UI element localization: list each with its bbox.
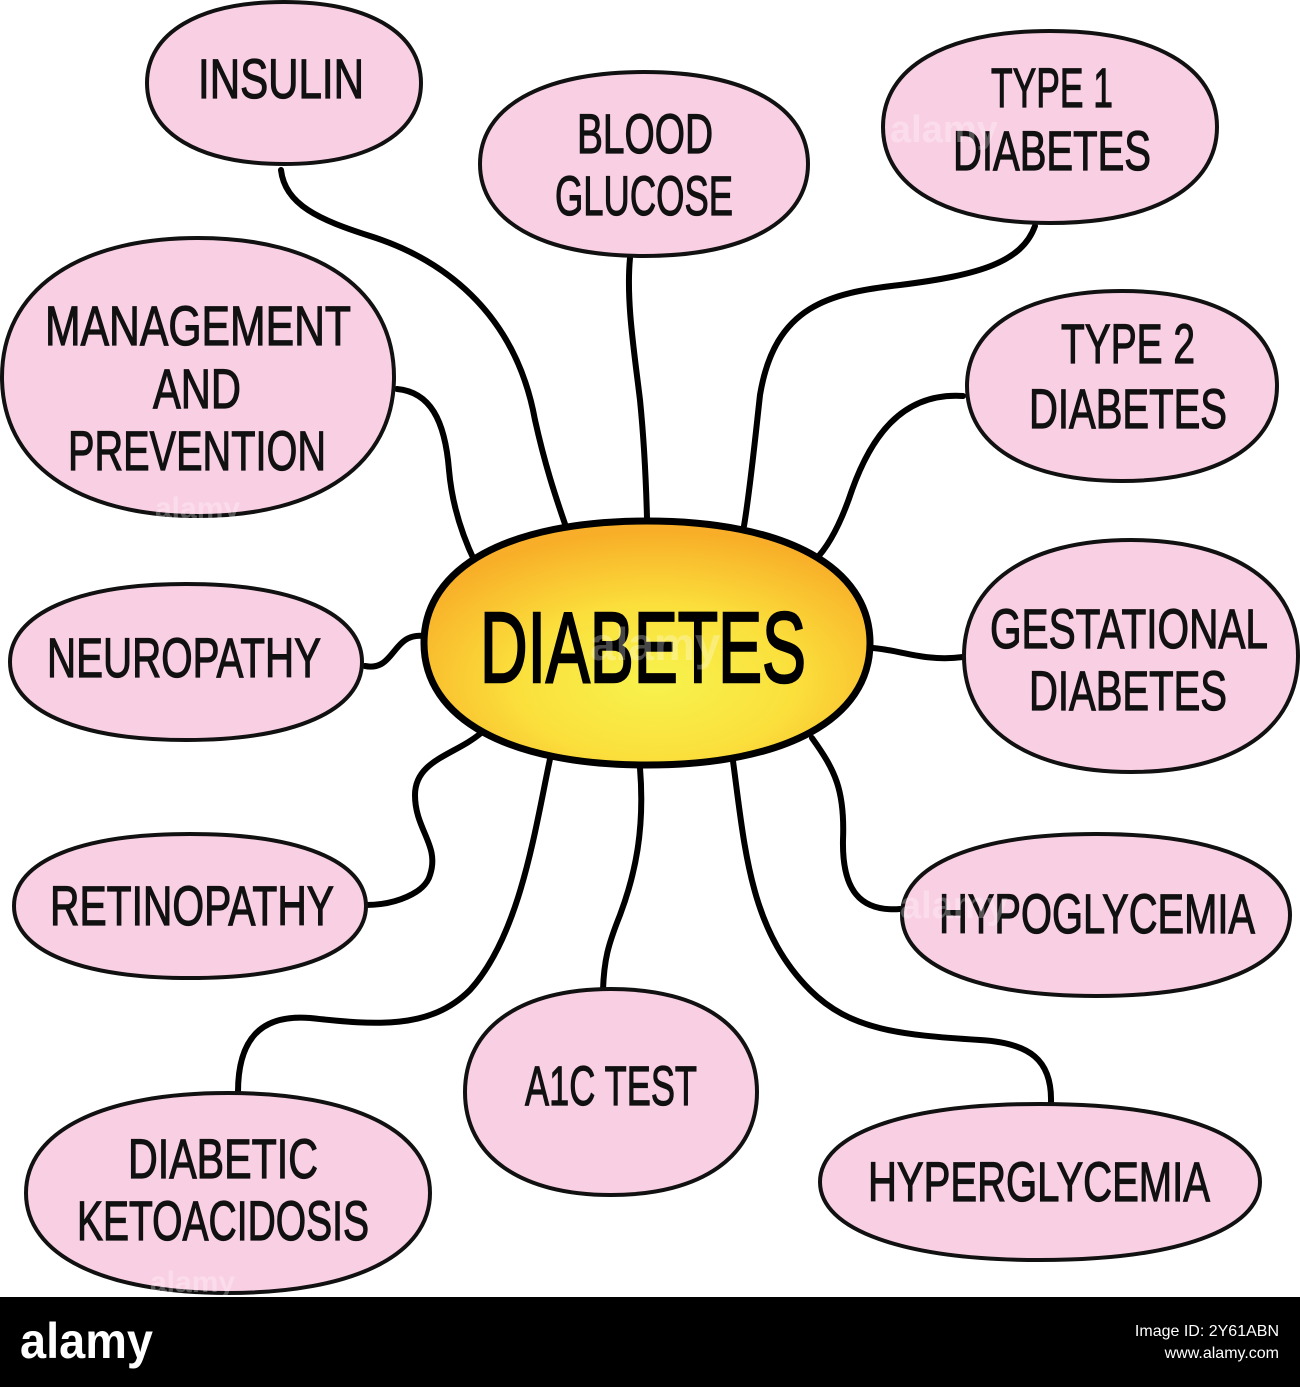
watermarks	[150, 109, 1008, 1299]
watermarks: alamy	[900, 885, 1008, 927]
node: Insulin: INSULIN	[198, 47, 364, 110]
connector lines	[238, 170, 1051, 1102]
website: www.alamy.com	[1164, 1345, 1279, 1362]
node: Type 1 Diabetes	[883, 31, 1217, 223]
central node: Diabetes	[424, 521, 870, 765]
watermarks: alamy	[155, 492, 240, 525]
node: Neuropathy	[10, 584, 362, 740]
node: Neuropathy: NEUROPATHY	[47, 626, 321, 689]
watermarks: alamy	[590, 618, 721, 670]
node: Type 1 Diabetes: DIABETES	[953, 119, 1151, 182]
node: Gestational Diabetes: DIABETES	[1029, 659, 1227, 722]
node: Type 1 Diabetes: TYPE 1	[991, 56, 1113, 119]
node: Diabetic Ketoacidosis: KETOACIDOSIS	[77, 1189, 369, 1252]
node: Management and Prevention	[2, 238, 394, 516]
node: A1C Test	[465, 989, 757, 1195]
node: Diabetic Ketoacidosis: DIABETIC	[128, 1127, 318, 1190]
node: Diabetic Ketoacidosis	[26, 1093, 430, 1293]
node: Management and Prevention: AND	[153, 357, 241, 420]
central node: Diabetes: DIABETES	[480, 592, 806, 704]
image id: Image ID: 2Y61ABN	[1135, 1323, 1279, 1340]
watermarks: alamy	[890, 109, 998, 151]
node: Blood Glucose	[480, 72, 808, 256]
node: Type 2 Diabetes: TYPE 2	[1061, 312, 1195, 375]
node: Blood Glucose: BLOOD	[577, 102, 713, 165]
footer bar	[0, 1297, 1300, 1387]
node: A1C Test: A1C TEST	[525, 1054, 697, 1117]
node: Hyperglycemia	[820, 1104, 1260, 1260]
node: Blood Glucose: GLUCOSE	[555, 164, 733, 227]
footer logo: alamy	[20, 1313, 153, 1369]
watermarks: alamy	[150, 1266, 235, 1299]
node: Retinopathy	[14, 834, 366, 978]
node: Management and Prevention: PREVENTION	[68, 419, 326, 482]
node: Management and Prevention: MANAGEMENT	[45, 294, 351, 357]
node: Type 2 Diabetes	[967, 291, 1277, 481]
node: Type 2 Diabetes: DIABETES	[1029, 377, 1227, 440]
node: Gestational Diabetes	[964, 540, 1298, 772]
node: Hypoglycemia	[902, 834, 1290, 996]
node: Retinopathy: RETINOPATHY	[50, 874, 334, 937]
node: Insulin	[147, 2, 421, 164]
